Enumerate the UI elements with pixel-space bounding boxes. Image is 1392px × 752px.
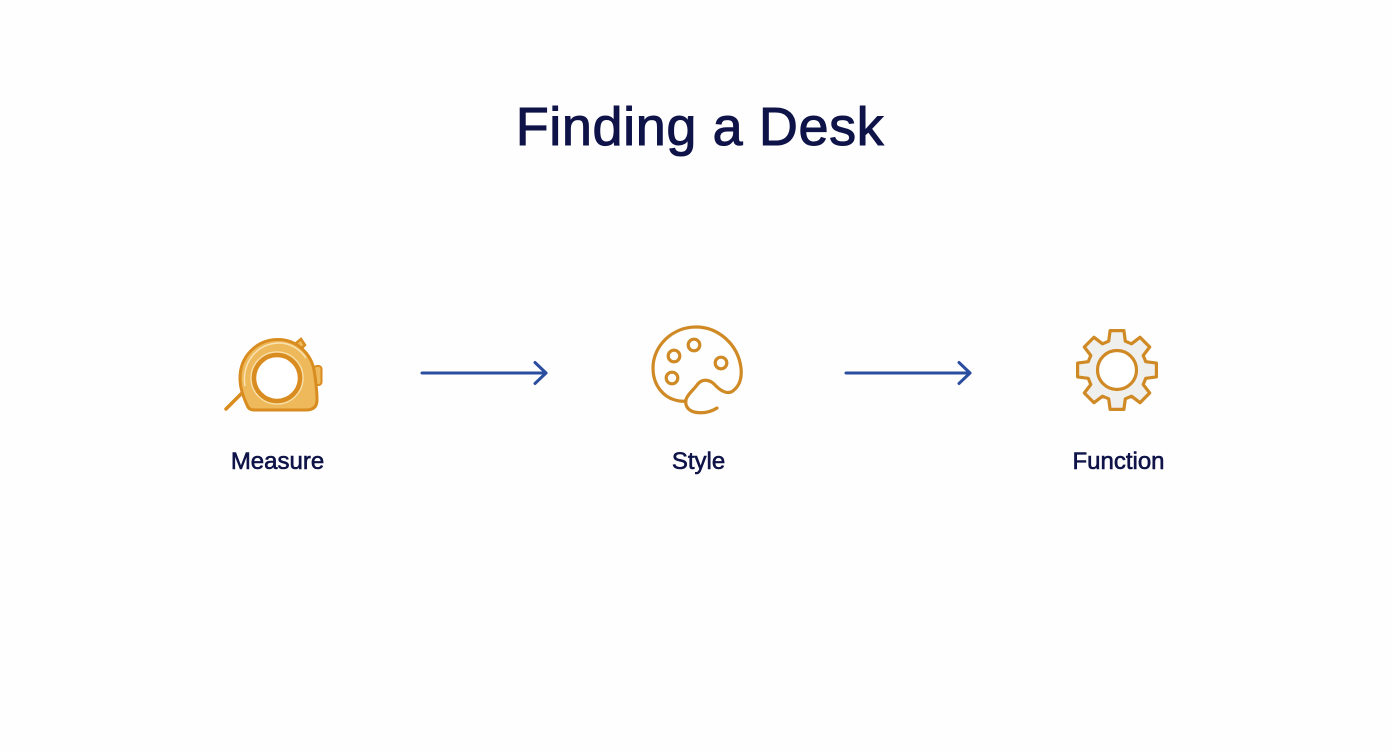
arrow: Measure to Style <box>422 362 546 384</box>
step: Function <box>1072 331 1165 475</box>
label: Function: Function <box>1072 448 1165 475</box>
icon: gear <box>1078 331 1156 409</box>
icon: palette <box>653 327 741 413</box>
arrow: Style to Function <box>846 362 970 384</box>
step: Measure <box>226 339 324 475</box>
label: Measure: Measure <box>231 448 324 475</box>
step: Style <box>653 327 741 475</box>
icon: tape measure <box>226 339 322 410</box>
label: Style: Style <box>672 448 725 475</box>
title: Finding a Desk <box>516 97 885 157</box>
